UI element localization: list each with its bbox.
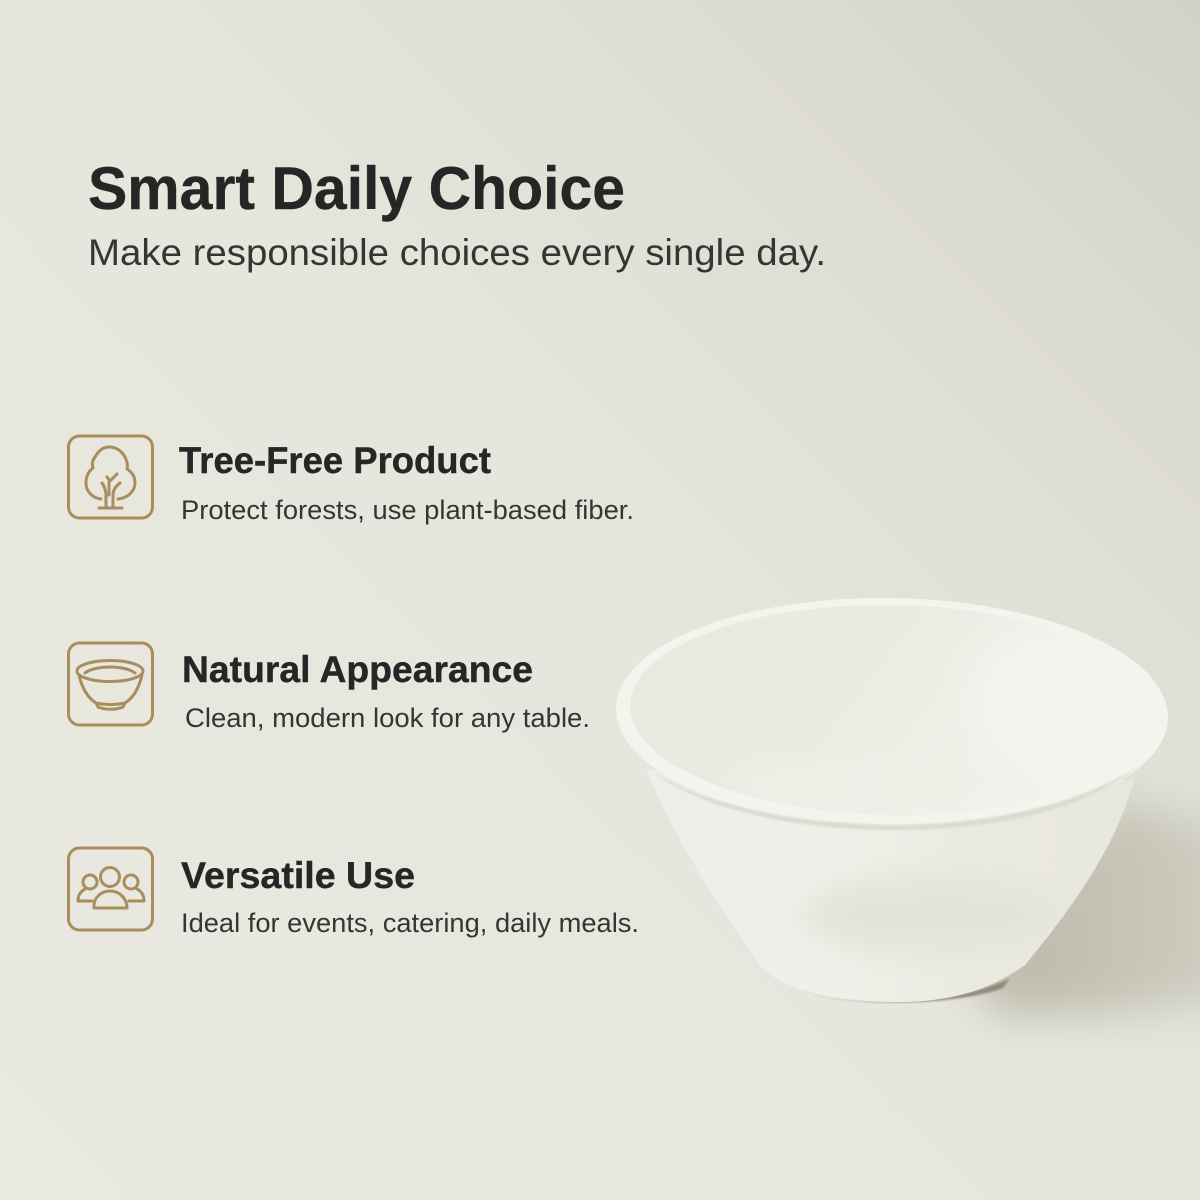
title: Smart Daily Choice <box>88 155 625 222</box>
bowl base edge <box>800 978 1010 1003</box>
heading: Versatile Use <box>181 855 415 896</box>
bowl shadow <box>970 800 1200 1015</box>
bowl interior shading <box>730 630 1150 805</box>
bowl rim underside <box>650 765 1140 830</box>
description: Ideal for events, catering, daily meals. <box>181 908 639 938</box>
heading: Natural Appearance <box>182 649 533 690</box>
bowl body shading <box>807 882 1005 948</box>
subtitle: Make responsible choices every single day. <box>88 232 826 273</box>
bowl interior <box>628 600 1158 820</box>
bowl rim <box>614 593 1170 833</box>
icon: people <box>68 848 152 930</box>
icon: tree <box>68 436 152 518</box>
feature: tree-free product <box>68 436 634 525</box>
feature: natural appearance <box>68 643 590 733</box>
description: Clean, modern look for any table. <box>185 703 590 733</box>
heading: Tree-Free Product <box>179 440 491 481</box>
product photo: bowl <box>614 593 1200 1015</box>
description: Protect forests, use plant-based fiber. <box>181 495 634 525</box>
bowl body <box>646 770 1134 1002</box>
feature: versatile use <box>68 848 639 938</box>
icon: bowl <box>68 643 152 725</box>
